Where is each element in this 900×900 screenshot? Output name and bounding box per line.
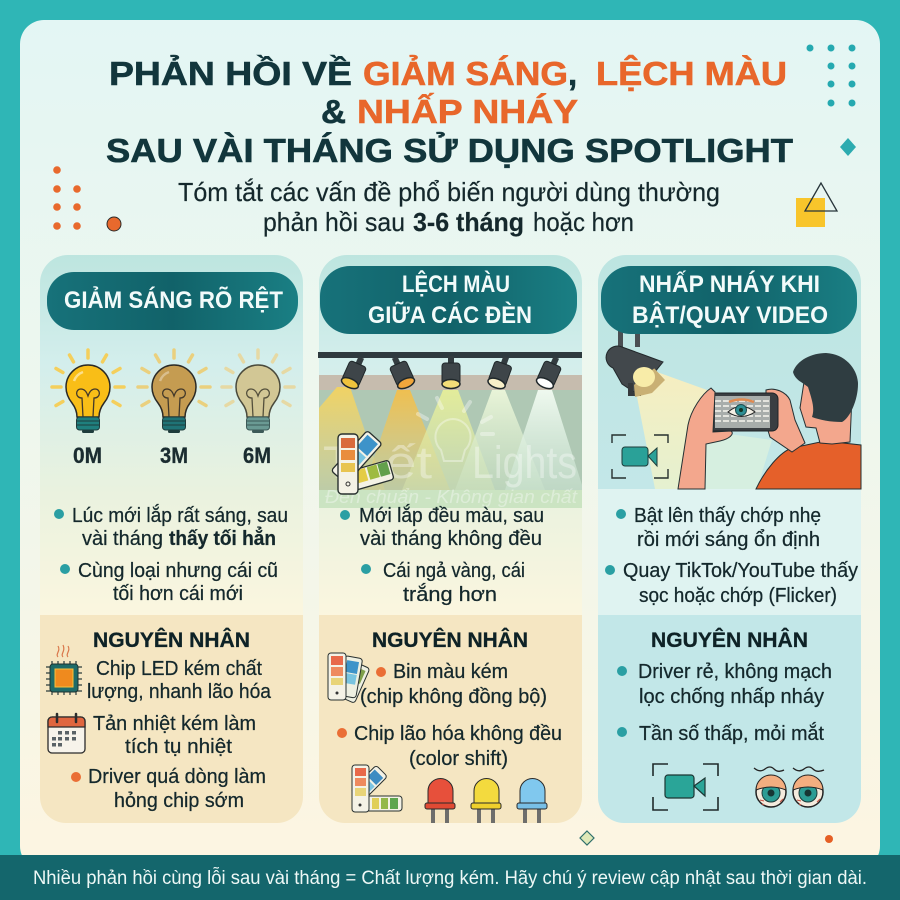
icon: video camera <box>653 764 718 810</box>
light beam <box>637 372 707 489</box>
man <box>756 353 861 489</box>
panel background <box>319 255 582 615</box>
bullet list: rồi mới sáng ổn định <box>637 529 820 551</box>
icon: bright bulb 0M <box>52 350 124 433</box>
decoration: orange dot <box>825 835 833 843</box>
illustration: filming a flickering light <box>598 255 861 489</box>
causes panel: lượng, nhanh lão hóa <box>87 681 272 703</box>
title: LỆCH MÀU <box>596 55 787 92</box>
bullet list: Quay TikTok/YouTube thấy <box>623 560 858 582</box>
subtitle: phản hồi sau <box>263 207 405 237</box>
heading pill: NHẤP NHÁY KHI <box>639 270 820 298</box>
subtitle: 3-6 tháng <box>413 207 524 237</box>
panel background <box>40 255 303 615</box>
heading pill <box>601 266 857 334</box>
stage lamp <box>606 325 665 397</box>
title: GIẢM SÁNG <box>363 55 568 92</box>
causes panel: lọc chống nhấp nháy <box>639 686 824 708</box>
decoration: small diamond <box>580 831 594 845</box>
causes panel <box>40 615 303 823</box>
bullet list: tối hơn cái mới <box>113 583 243 605</box>
panel: giảm sáng <box>40 255 303 823</box>
title: PHẢN HỒI VỀ <box>109 55 352 92</box>
panel background <box>598 255 861 615</box>
causes panel: Driver rẻ, không mạch <box>638 661 832 683</box>
video icon <box>612 435 668 478</box>
causes panel: (chip không đồng bộ) <box>360 686 547 708</box>
bullet list: vài tháng <box>82 528 163 550</box>
causes panel: NGUYÊN NHÂN <box>93 628 250 652</box>
icon: colour swatch bottom <box>351 765 402 812</box>
icon: blue LED <box>517 778 547 823</box>
causes panel: tích tụ nhiệt <box>125 736 232 758</box>
title: & <box>321 93 346 130</box>
bullet list: Cùng loại nhưng cái cũ <box>78 560 278 582</box>
causes panel: Tần số thấp, mỏi mắt <box>639 722 824 745</box>
bullet list: Lúc mới lắp rất sáng, sau <box>72 504 288 527</box>
decoration: orange dots <box>53 166 121 231</box>
panel: lệch màu <box>318 255 582 823</box>
watermark: T <box>323 437 353 488</box>
subtitle: Tóm tắt các vấn đề phổ biến người dùng thường <box>178 177 720 207</box>
icon: yellow LED <box>471 778 501 823</box>
heading pill: BẬT/QUAY VIDEO <box>632 301 828 329</box>
causes panel: Chip LED kém chất <box>96 658 262 680</box>
heading pill: LỆCH MÀU <box>402 270 510 298</box>
bullet list: trắng hơn <box>403 583 497 606</box>
heading pill <box>47 272 298 330</box>
hand: left with arm <box>678 388 732 489</box>
bullet list <box>340 504 544 606</box>
title: NHẤP NHÁY <box>357 93 578 130</box>
heading pill: GIỮA CÁC ĐÈN <box>368 301 532 329</box>
watermark: Đèn chuẩn - Không gian chất <box>325 487 578 507</box>
bullet list: vài tháng không đều <box>360 528 542 550</box>
icon: chip <box>46 645 82 695</box>
causes panel <box>319 615 582 823</box>
hand: right <box>766 389 805 452</box>
bullet list <box>605 505 858 607</box>
heading pill: GIẢM SÁNG RÕ RỆT <box>64 285 283 314</box>
watermark: Lights <box>472 437 577 488</box>
illustration: track light scene <box>318 352 582 508</box>
subtitle <box>178 177 720 237</box>
footer bar <box>0 855 900 900</box>
icon: dim bulb 6M <box>222 350 294 433</box>
subtitle: hoặc hơn <box>533 207 634 237</box>
heading pill <box>320 266 577 334</box>
icon: dimmer bulb 3M <box>138 350 210 433</box>
icon: colour swatch small <box>328 653 370 703</box>
track bar <box>318 352 582 358</box>
decoration: yellow square and triangle <box>796 183 837 227</box>
title: SAU VÀI THÁNG SỬ DỤNG SPOTLIGHT <box>106 132 793 169</box>
bullet list: sọc hoặc chớp (Flicker) <box>639 585 837 607</box>
causes panel: Bin màu kém <box>393 661 508 683</box>
bullet list: Bật lên thấy chớp nhẹ <box>634 505 821 527</box>
bullet list: Mới lắp đều màu, sau <box>359 504 544 527</box>
watermark: ết <box>385 437 433 488</box>
causes panel: (color shift) <box>409 748 508 770</box>
bullet list: Cái ngả vàng, cái <box>383 560 525 582</box>
bullet list: thấy tối hẳn <box>169 526 276 550</box>
decoration: teal diamond <box>840 138 856 156</box>
bulb labels: 3M <box>160 443 188 468</box>
icon: colour swatch large <box>331 430 394 494</box>
bulb labels: 6M <box>243 443 271 468</box>
causes panel: Driver quá dòng làm <box>88 766 266 788</box>
spotlights <box>340 354 565 391</box>
causes panel: Tản nhiệt kém làm <box>93 713 256 735</box>
phone <box>707 393 778 431</box>
causes panel: NGUYÊN NHÂN <box>651 628 808 652</box>
icon: tired eyes <box>754 767 824 807</box>
panel: nhấp nháy <box>598 255 861 823</box>
title <box>106 55 793 169</box>
causes panel <box>598 615 861 823</box>
icon: red LED <box>425 778 455 823</box>
causes panel: Chip lão hóa không đều <box>354 723 562 745</box>
bullet list <box>54 504 288 605</box>
causes panel: NGUYÊN NHÂN <box>372 628 528 652</box>
bulb labels <box>73 443 271 468</box>
icon: calendar <box>48 714 85 753</box>
title: , <box>568 55 577 92</box>
decoration: teal dots <box>806 44 856 106</box>
watermark <box>323 398 578 507</box>
causes panel: hỏng chip sớm <box>114 790 244 812</box>
bulb labels: 0M <box>73 443 102 468</box>
footer bar: Nhiều phản hồi cùng lỗi sau vài tháng = Chất lượng kém. Hãy chú ý review cập nhật sau thời gian dài. <box>33 867 867 889</box>
